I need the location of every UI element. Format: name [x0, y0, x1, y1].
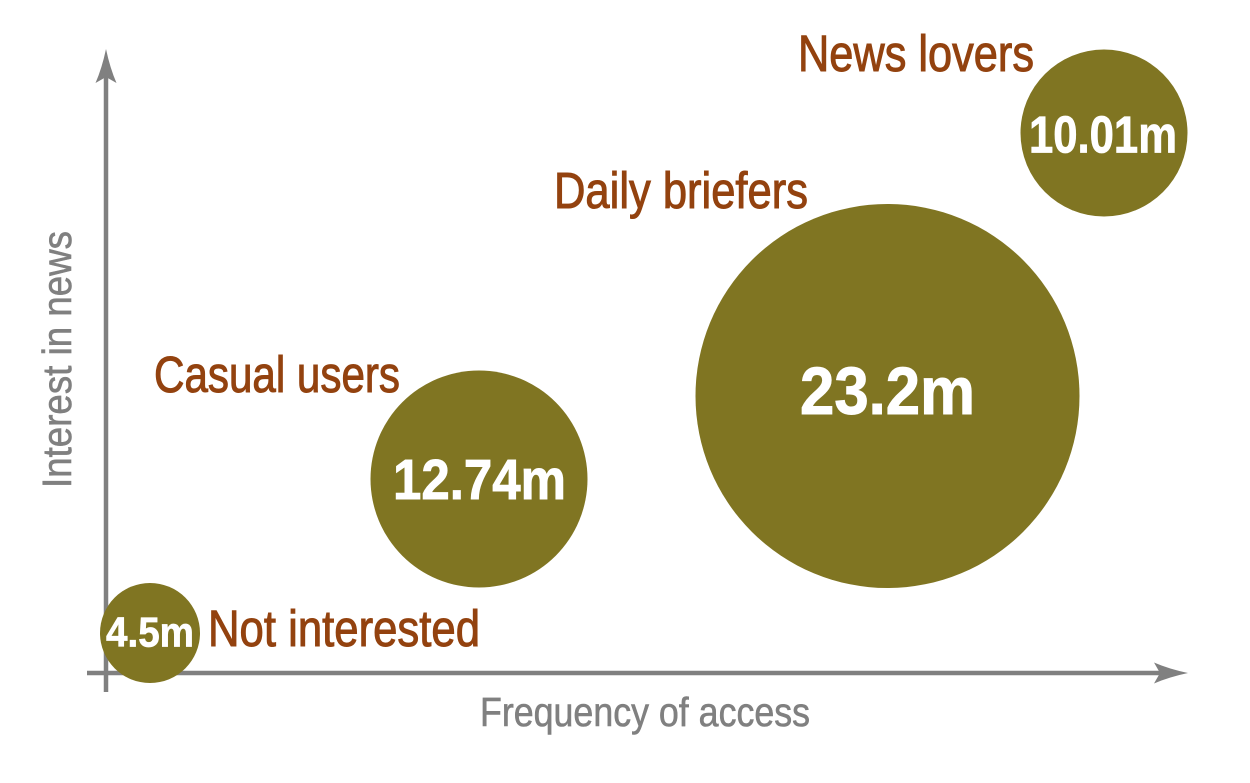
- label: daily briefers: Daily briefers: [554, 162, 808, 219]
- bubble: news lovers: 10.01m: [1029, 106, 1177, 164]
- bubble: not interested: 4.5m: [106, 608, 194, 656]
- bubble: daily briefers: [696, 204, 1080, 588]
- bubble: news lovers: [1020, 50, 1188, 216]
- bubble: daily briefers: 23.2m: [800, 354, 975, 429]
- x axis arrow: [87, 662, 1188, 684]
- y axis arrow: [96, 49, 116, 692]
- label: news lovers: News lovers: [798, 25, 1034, 82]
- bubble: not interested: [100, 583, 200, 683]
- y axis label: Interest in news: [34, 231, 80, 488]
- bubble: casual users: [370, 370, 588, 588]
- x axis label: Frequency of access: [480, 689, 810, 735]
- label: not interested: Not interested: [208, 600, 480, 657]
- bubble: casual users: 12.74m: [393, 448, 566, 512]
- label: casual users: Casual users: [154, 346, 400, 403]
